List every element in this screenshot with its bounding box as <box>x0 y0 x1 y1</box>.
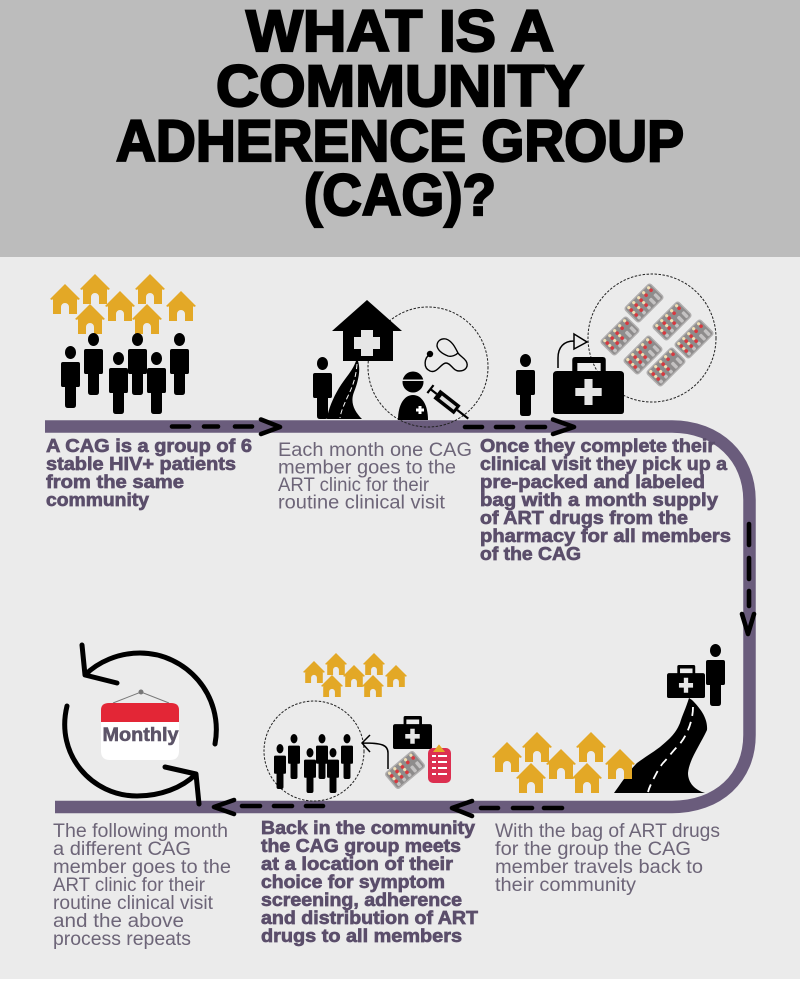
icon: road <box>614 698 707 793</box>
title: COMMUNITY <box>216 54 584 119</box>
icon: patient <box>706 644 725 706</box>
icon: clipboard <box>428 746 451 783</box>
text: step 4: member travels back to <box>495 857 703 878</box>
icon: medical bag <box>553 357 624 414</box>
text: step 5: at a location of their <box>261 853 453 874</box>
icon: clinic house <box>332 300 402 361</box>
text: step 3: pharmacy for all members <box>480 525 731 546</box>
panel: step 6 monthly repeat <box>53 645 231 950</box>
arrow: step 3 to step 4 <box>742 524 754 634</box>
icon: six patients <box>274 734 353 793</box>
icon: stethoscope chest piece <box>427 351 433 357</box>
text: step 6: routine clinical visit <box>53 893 214 914</box>
process path <box>45 426 750 807</box>
title: WHAT IS A <box>246 0 554 64</box>
text: step 6: The following month <box>53 821 228 842</box>
text: step 3: bag with a month supply <box>480 489 719 510</box>
icon: patient <box>516 354 535 416</box>
text: step 6 <box>53 821 231 950</box>
header band <box>0 0 800 257</box>
icon: houses <box>303 653 407 697</box>
icon: patient <box>313 357 332 419</box>
page background <box>0 257 800 979</box>
text: step 2: ART clinic for their <box>278 475 430 496</box>
panel: step 4 travel back <box>492 644 725 896</box>
text: step 1 <box>46 435 252 510</box>
text: step 6: and the above <box>53 911 184 932</box>
text: step 1: A CAG is a group of 6 <box>46 435 252 456</box>
text: step 5: Back in the community <box>261 817 476 838</box>
text: step 5: choice for symptom <box>261 871 445 892</box>
text: step 4: their community <box>495 875 637 896</box>
text: step 3: of ART drugs from the <box>480 507 688 528</box>
title: (CAG)? <box>304 163 496 228</box>
text: step 2 <box>278 440 472 514</box>
text: step 3: clinical visit they pick up a <box>480 453 728 474</box>
dashed circle <box>368 307 488 427</box>
text: step 4 <box>495 821 720 896</box>
text: step 3: Once they complete their <box>480 435 715 456</box>
dashed circle <box>588 274 716 402</box>
icon: pill pack <box>385 751 425 789</box>
text: step 5 <box>261 817 479 946</box>
icon: houses <box>492 732 635 793</box>
icon: monthly sign: Monthly <box>102 725 179 746</box>
arrow: step 1 to step 2 <box>172 420 280 434</box>
text: step 6: a different CAG <box>53 839 191 860</box>
text: step 3 <box>480 435 731 564</box>
title: ADHERENCE GROUP <box>116 109 684 174</box>
icon: cycle arrows <box>65 645 216 804</box>
text: step 2: Each month one CAG <box>278 440 472 461</box>
text: step 6: process repeats <box>53 929 191 950</box>
text: step 5: screening, adherence <box>261 889 462 910</box>
arrow: step 4 to step 5 <box>452 801 562 816</box>
icon: monthly sign <box>101 690 179 760</box>
icon: pill packs <box>600 283 714 387</box>
text: step 5: the CAG group meets <box>261 835 461 856</box>
panel: step 3 pharmacy pick-up <box>480 274 731 564</box>
text: step 3: of the CAG <box>480 543 581 564</box>
text: step 1: community <box>46 489 150 510</box>
icon: houses <box>50 274 196 334</box>
text: step 5: drugs to all members <box>261 925 462 946</box>
icon: medical bag <box>393 716 432 749</box>
panel: step 5 community distribution <box>261 653 479 946</box>
icon: doctor <box>398 372 428 420</box>
panel: step 1 group of patients <box>46 274 252 510</box>
text: step 5: and distribution of ART <box>261 907 479 928</box>
text: step 2: routine clinical visit <box>278 492 446 514</box>
icon: stethoscope <box>425 339 467 372</box>
dashed circle <box>264 701 364 801</box>
arrow: to group <box>362 735 388 769</box>
arrow: step 2 to step 3 <box>465 420 574 434</box>
icon: six patients <box>61 333 189 414</box>
text: step 4: for the group the CAG <box>495 839 691 860</box>
panel: step 2 clinic visit <box>278 300 488 514</box>
text: step 3: pre-packed and labeled <box>480 471 705 492</box>
text: step 6: ART clinic for their <box>53 875 206 896</box>
icon: medical bag <box>667 665 705 698</box>
arrow: step 5 to step 6 <box>214 800 323 814</box>
title <box>116 0 684 228</box>
text: step 2: member goes to the <box>278 458 456 478</box>
icon: syringe <box>427 385 472 423</box>
text: step 1: stable HIV+ patients <box>46 453 236 474</box>
icon: road to clinic <box>327 361 362 419</box>
text: step 1: from the same <box>46 471 184 492</box>
text: step 6: member goes to the <box>53 857 231 878</box>
text: step 4: With the bag of ART drugs <box>495 821 720 842</box>
arrow: to drugs <box>558 334 587 368</box>
